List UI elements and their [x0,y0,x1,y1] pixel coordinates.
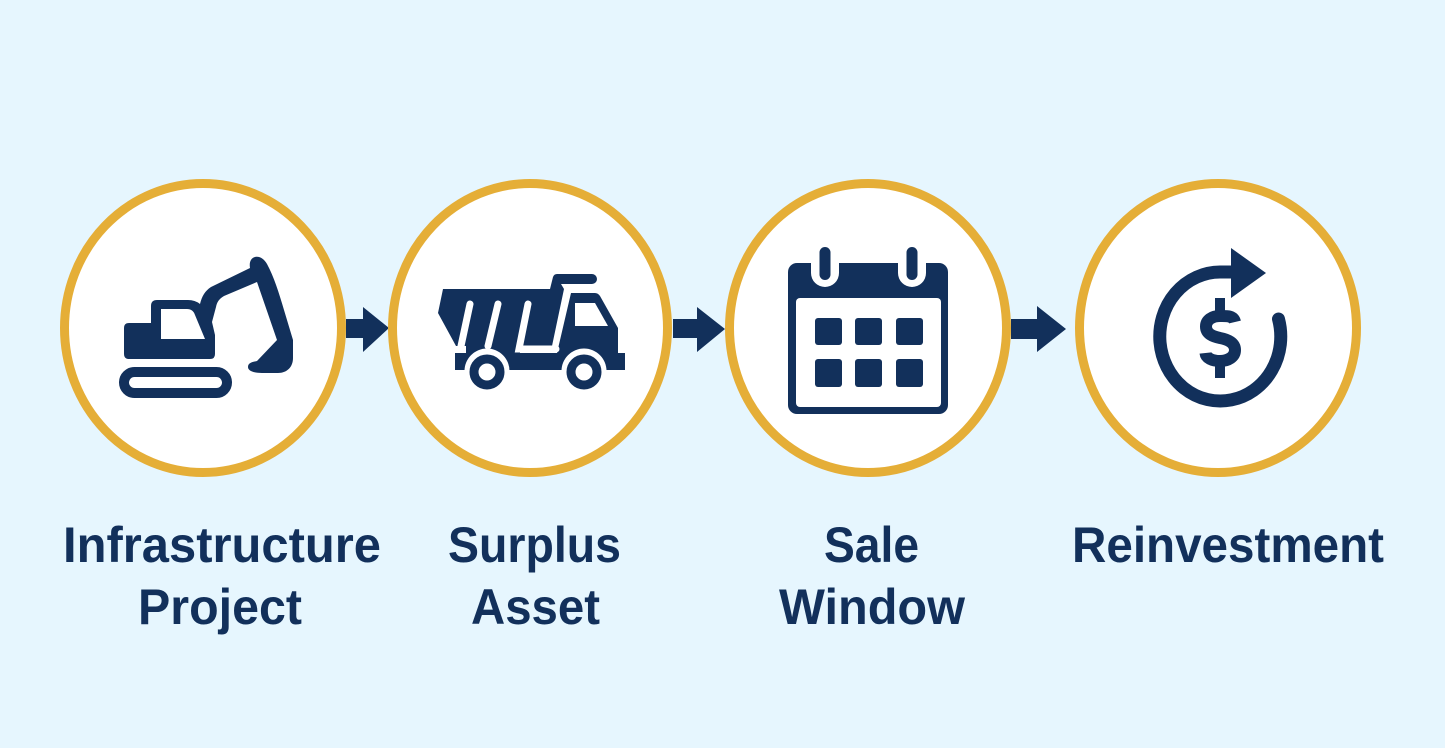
icon: dollar with circular arrow [1160,248,1281,401]
arrow: step 3 to 4 [1011,306,1066,352]
icon: calendar [788,247,948,414]
circle: step 2 [392,184,668,472]
label: Sale Window [779,517,965,635]
circle: step 1 [64,184,342,472]
step 3: sale window [730,184,1006,635]
arrow: step 1 to 2 [346,307,389,352]
label: Infrastructure Project: Infrastructure [63,517,381,573]
label: Surplus Asset: Surplus [448,517,621,573]
label: Reinvestment: Reinvestment [1072,517,1384,573]
step 1: infrastructure project [63,184,381,635]
label: Infrastructure Project [63,517,381,635]
label: Sale Window: Sale [824,517,919,573]
circle: step 3 [730,184,1006,472]
label: Sale Window: Window [779,579,965,635]
label: Infrastructure Project: Project [138,579,302,635]
label: Surplus Asset: Asset [471,579,600,635]
step 4: reinvestment [1072,184,1384,573]
step 2: surplus asset [392,184,668,635]
label: Surplus Asset [448,517,621,635]
icon: excavator [124,257,293,393]
arrow: step 2 to 3 [673,307,725,352]
icon: dump truck [438,274,625,394]
circle: step 4 [1080,184,1356,472]
